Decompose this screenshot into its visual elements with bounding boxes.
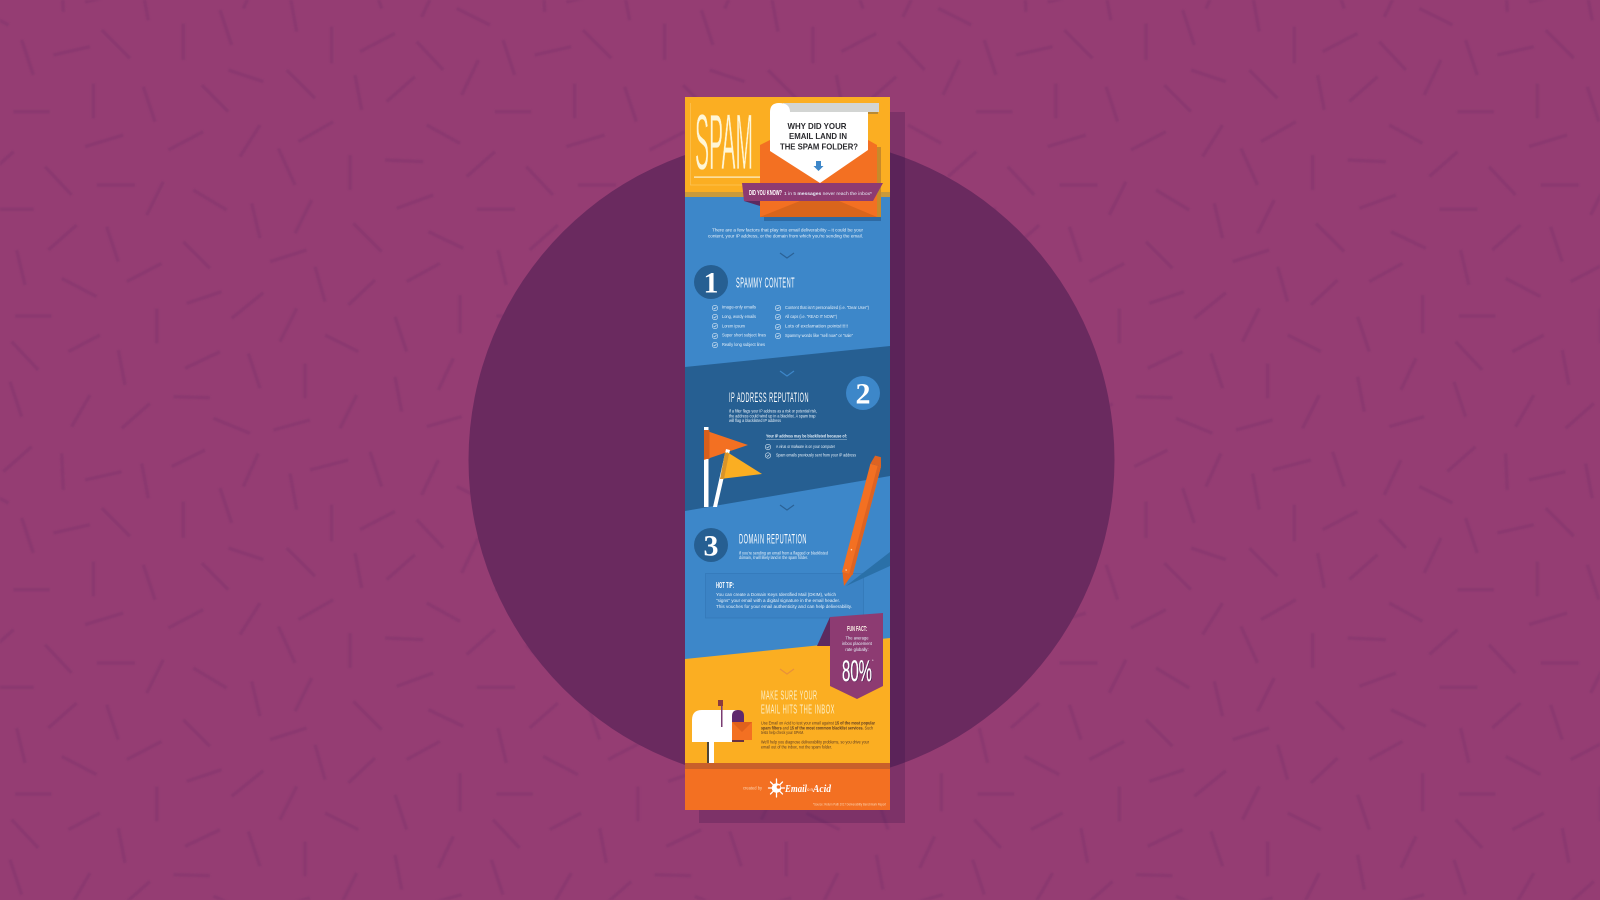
callout: did you know ribbon (742, 183, 883, 206)
text: created by: created by (743, 786, 763, 790)
panel: domain reputation: DOMAIN REPUTATION (739, 530, 807, 546)
icon: mailbox (692, 700, 752, 763)
text: ip description: will flag a blacklisted IP address (729, 418, 781, 423)
list: left column: Lorem ipsum (722, 324, 746, 328)
callout: did you know ribbon: 1 in 5 messages never reach the inbox* (784, 191, 872, 196)
heading: letter question: EMAIL LAND IN (789, 132, 847, 141)
panel: hot tip: HOT TIP: (716, 581, 734, 590)
text: inbox description: tests help check your SPAM. (761, 730, 804, 735)
arrow: chevron three (780, 505, 794, 510)
text: inbox description: email out of the inbox, not the spam folder. (761, 744, 832, 750)
text: inbox description (761, 720, 875, 750)
text: intro: There are a few factors that play into email deliverability – it could be your (712, 228, 864, 232)
panel: make sure your email hits the inbox: EMAIL HITS THE INBOX (761, 702, 835, 716)
callout: fun fact ribbon: The average (846, 636, 869, 640)
stat: 80 percent: 80% (843, 656, 873, 689)
icon: flags (704, 427, 762, 507)
heading: inbox (761, 688, 835, 716)
panel: ip address reputation (685, 346, 890, 511)
stat: 80 percent: 80% (842, 655, 872, 688)
text: inbox description: We'll help you diagnose deliverability problems, so you drive your (761, 740, 870, 744)
callout: fun fact ribbon: inbox placement (842, 641, 873, 646)
stat: 80 percent: * (872, 658, 874, 663)
text: inbox description: Use Email on Acid to test your email against 15 of the most popular (761, 720, 875, 726)
list: left column: Image-only emails (722, 304, 756, 310)
text: intro: content, your IP address, or the domain from which you're sending the email. (708, 234, 863, 238)
text: intro (708, 228, 864, 238)
panel: spammy content (694, 265, 870, 348)
icon: number 3 (694, 528, 728, 562)
callout: fun fact ribbon: rate globally: (845, 647, 869, 652)
list: right column: Spammy words like "sell now" or "sale" (785, 333, 854, 338)
list: blacklist reasons: Spam emails previously sent from your IP address (776, 452, 856, 458)
heading: letter question (780, 122, 858, 152)
icon: number 2: 2 (856, 378, 870, 410)
icon: email on acid logo (768, 779, 831, 797)
panel: domain reputation (694, 455, 890, 618)
arrow: chevron four (780, 669, 794, 674)
icon: email on acid logo: on (807, 787, 813, 792)
stat: 80 percent (842, 655, 874, 689)
panel: hot tip: "signs" your email with a digital signature in the email header. (716, 598, 840, 603)
letter (770, 103, 879, 183)
panel: header: SPAM (695, 97, 753, 186)
icon: number 1 (694, 265, 728, 300)
heading: letter question: THE SPAM FOLDER? (780, 142, 858, 152)
heading: inbox: MAKE SURE YOUR (761, 688, 818, 702)
panel: make sure your email hits the inbox (685, 638, 890, 763)
icon: pen (839, 455, 890, 587)
text: ip description (729, 408, 817, 423)
text: source: *Source: Return Path 2017 Deliverability Benchmark Report (813, 802, 886, 806)
icon: down arrow (814, 161, 824, 171)
panel: header (685, 97, 890, 221)
list: left column: Long, wordy emails (722, 314, 756, 319)
panel: hot tip (706, 574, 864, 618)
callout: fun fact ribbon: FUN FACT: (847, 626, 867, 633)
poster drop shadow (699, 112, 905, 823)
text: ip description: the address could wind up in a blacklist. A spam trap (729, 414, 816, 418)
text: domain description: If you're sending an email from a flagged or blacklisted (739, 550, 829, 556)
arrow: chevron one (780, 253, 794, 258)
callout: did you know ribbon: DID YOU KNOW? (749, 190, 782, 197)
panel: hot tip: This vouches for your email authenticity and can help deliverability. (716, 604, 852, 609)
list: right column (775, 305, 870, 339)
text: ip description: If a filter flags your IP address as a risk or potential risk, (729, 408, 817, 414)
list: right column: All caps (i.e. "READ IT NOW!") (785, 314, 838, 319)
list: right column: Content that isn't personalized (i.e. "Dear User") (785, 305, 870, 310)
text: domain description (739, 550, 829, 560)
arrow: chevron two (780, 371, 794, 376)
list: left column: Really long subject lines (722, 342, 765, 347)
panel: ip address reputation: IP ADDRESS REPUTATION (729, 389, 809, 405)
list: right column: Lots of exclamation points!!!!!! (785, 324, 848, 328)
list: blacklist reasons: A virus or malware is on your computer (776, 444, 836, 449)
panel: footer (685, 763, 890, 810)
large dark circle (468, 137, 1114, 783)
panel: spammy content: SPAMMY CONTENT (736, 276, 795, 292)
panel: hot tip: You can create a Domain Keys Identified Mail (DKIM), which (716, 592, 837, 597)
list: blacklist reasons: Your IP address may be blacklisted because of: (766, 434, 847, 438)
icon: number 2 (846, 376, 880, 410)
icon: email on acid logo: Email (784, 783, 808, 795)
heading: letter question: WHY DID YOUR (788, 122, 847, 131)
list: left column: Super short subject lines (722, 332, 766, 338)
icon: number 1: 1 (704, 266, 718, 300)
text: inbox description: spam filters and 15 of the most common blacklist services. Such (761, 726, 874, 730)
text: domain description: domain, it will likely land in the spam folder. (739, 555, 808, 560)
list: left column (712, 304, 766, 348)
icon: number 3: 3 (704, 530, 718, 562)
poster (685, 97, 890, 810)
icon: email on acid logo: Acid (812, 783, 831, 795)
icon: envelope (760, 103, 881, 221)
list: blacklist reasons (765, 434, 856, 458)
callout: fun fact ribbon (817, 613, 883, 699)
